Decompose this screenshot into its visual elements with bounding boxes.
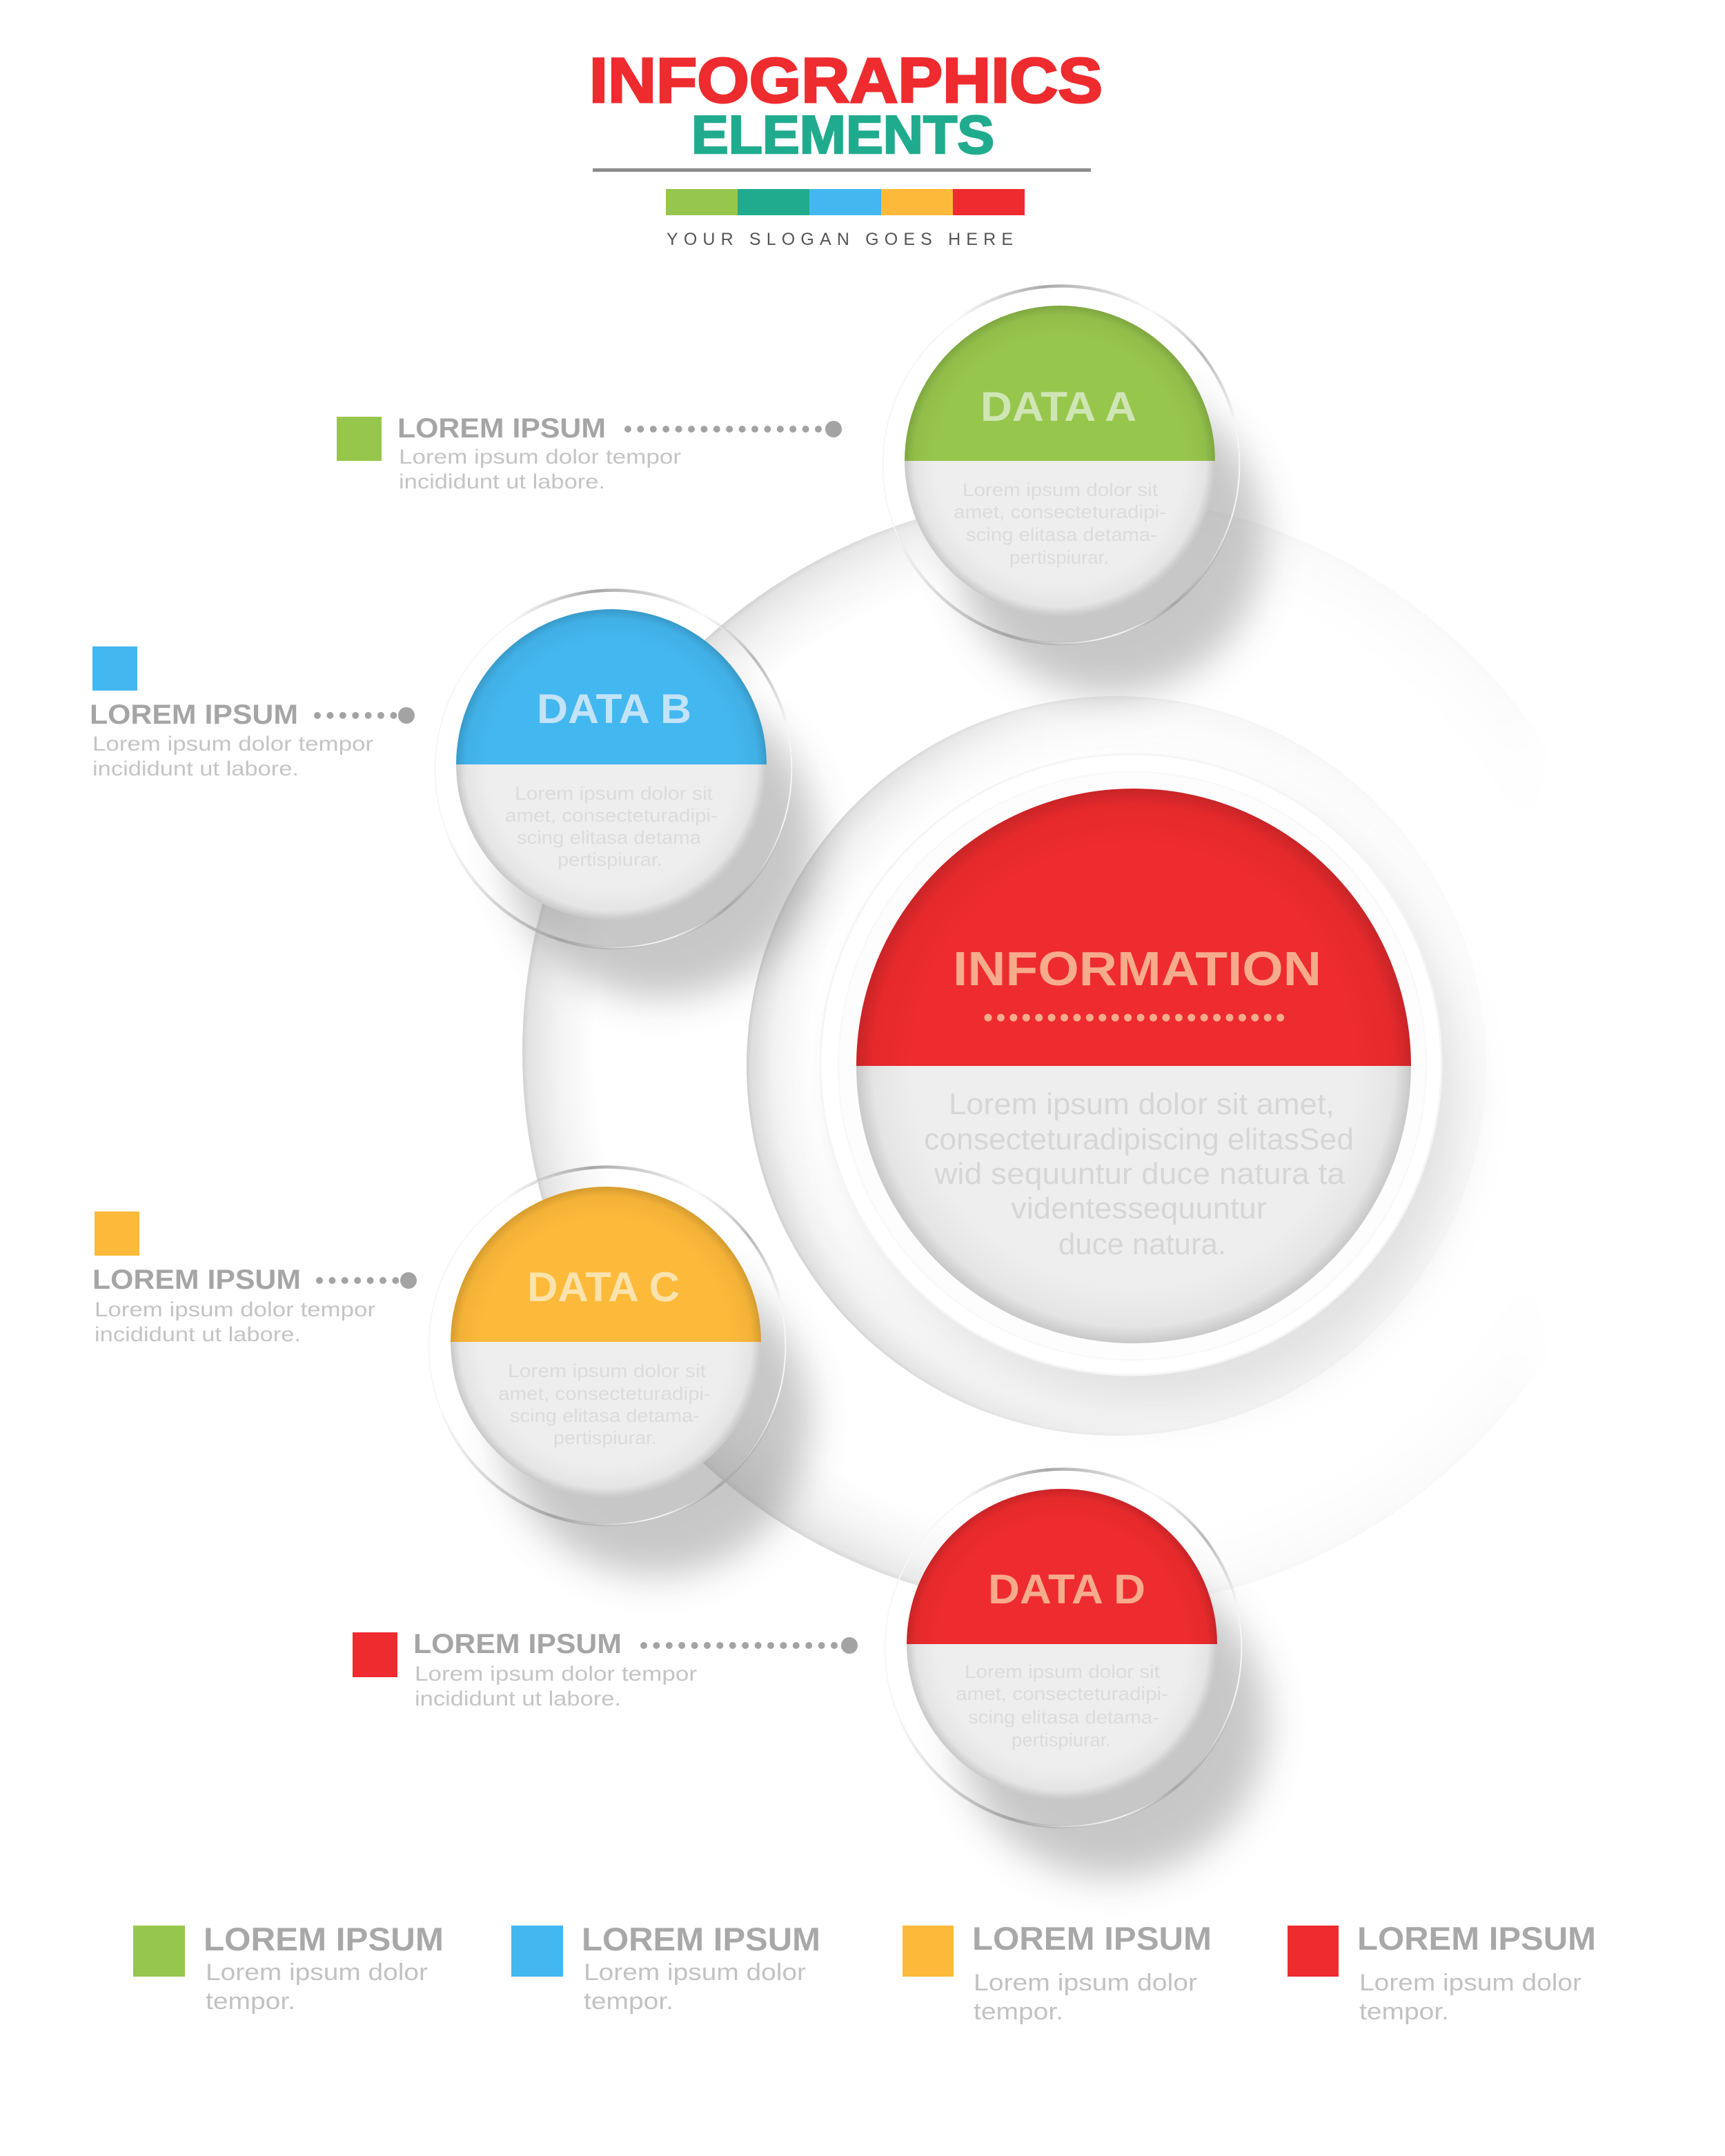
data d body text: Lorem ipsum dolor sit bbox=[965, 1661, 1161, 1682]
circle: data c bbox=[429, 1167, 811, 1576]
data d body text: amet, consecteturadipi- bbox=[956, 1683, 1168, 1704]
dotted leader c bbox=[319, 1277, 400, 1284]
legend: blue bbox=[511, 1921, 820, 2015]
data b body text: pertispiurar. bbox=[558, 849, 662, 870]
heading: data b: DATA B bbox=[537, 686, 691, 732]
legend: orange: LOREM IPSUM bbox=[972, 1920, 1212, 1957]
legend: green: Lorem ipsum dolor bbox=[206, 1959, 428, 1986]
information body text bbox=[924, 1087, 1354, 1261]
information body text: videntessequuntur bbox=[1011, 1191, 1267, 1225]
circle: data a bbox=[883, 286, 1265, 695]
legend: red bbox=[1288, 1920, 1596, 2025]
legend: orange: tempor. bbox=[974, 1999, 1063, 2025]
colour bar bbox=[666, 189, 1025, 215]
data c body text: Lorem ipsum dolor sit bbox=[508, 1361, 707, 1381]
central disc with rings bbox=[747, 696, 1486, 1436]
data a body text: amet, consecteturadipi- bbox=[954, 502, 1166, 522]
data d body text: scing elitasa detama- bbox=[968, 1707, 1159, 1728]
legend: green bbox=[133, 1921, 444, 2015]
legend: red: tempor. bbox=[1359, 1999, 1449, 2025]
legend: green: tempor. bbox=[206, 1988, 295, 2015]
callout: data b label: incididunt ut labore. bbox=[92, 758, 299, 780]
data b body text: Lorem ipsum dolor sit bbox=[515, 783, 713, 804]
title block bbox=[589, 46, 1103, 249]
circle: information bbox=[851, 783, 1417, 1349]
heading: data c: DATA C bbox=[527, 1264, 680, 1310]
callout: data c label: LOREM IPSUM bbox=[92, 1265, 301, 1295]
callout: data c label bbox=[92, 1211, 417, 1346]
dotted divider bbox=[988, 1014, 1293, 1021]
circle: data b bbox=[435, 590, 816, 998]
title: infographics: INFOGRAPHICS bbox=[589, 46, 1103, 116]
legend: red: Lorem ipsum dolor bbox=[1359, 1970, 1581, 1996]
dotted leader a bbox=[628, 426, 825, 433]
callout: data b label bbox=[90, 646, 415, 780]
data a body text: scing elitasa detama- bbox=[966, 524, 1157, 545]
callout: data b label: LOREM IPSUM bbox=[90, 700, 298, 730]
data c body text: scing elitasa detama- bbox=[510, 1405, 700, 1426]
swatch: blue bbox=[92, 646, 137, 691]
callout: data b label: Lorem ipsum dolor tempor bbox=[92, 733, 373, 755]
swatch: red bbox=[353, 1632, 397, 1677]
dotted leader d bbox=[644, 1642, 841, 1649]
slogan: YOUR SLOGAN GOES HERE bbox=[667, 230, 1013, 249]
data a body text: Lorem ipsum dolor sit bbox=[963, 479, 1159, 500]
title: elements: ELEMENTS bbox=[691, 104, 994, 165]
callout: data a label: LOREM IPSUM bbox=[397, 413, 606, 444]
data a body text bbox=[954, 479, 1166, 568]
data c body text: amet, consecteturadipi- bbox=[498, 1383, 711, 1404]
legend: orange: Lorem ipsum dolor bbox=[974, 1970, 1197, 1996]
callout: data d label: incididunt ut labore. bbox=[415, 1688, 621, 1710]
legend: blue: LOREM IPSUM bbox=[582, 1921, 820, 1957]
swatch: orange bbox=[95, 1211, 139, 1256]
data b body text bbox=[505, 783, 718, 870]
callout: data c label: Lorem ipsum dolor tempor bbox=[95, 1298, 375, 1321]
swatch: green bbox=[337, 417, 382, 461]
data c body text bbox=[498, 1361, 711, 1448]
data b body text: scing elitasa detama bbox=[517, 827, 702, 848]
information body text: Lorem ipsum dolor sit amet, bbox=[949, 1087, 1334, 1121]
data d body text: pertispiurar. bbox=[1012, 1730, 1111, 1750]
legend: blue: tempor. bbox=[584, 1988, 673, 2015]
callout: data a label: incididunt ut labore. bbox=[399, 471, 605, 493]
data b body text: amet, consecteturadipi- bbox=[505, 805, 718, 826]
heading: data d: DATA D bbox=[988, 1566, 1145, 1612]
connecting ring band bbox=[522, 519, 1228, 1590]
data d body text bbox=[956, 1661, 1168, 1750]
heading: information: INFORMATION bbox=[953, 942, 1321, 996]
legend: orange bbox=[903, 1920, 1212, 2025]
callout: data a label: Lorem ipsum dolor tempor bbox=[399, 446, 681, 468]
legend: blue: Lorem ipsum dolor bbox=[584, 1959, 806, 1986]
dotted leader b bbox=[317, 712, 398, 719]
legend: green: LOREM IPSUM bbox=[204, 1921, 444, 1957]
information body text: duce natura. bbox=[1058, 1227, 1226, 1261]
callout: data d label bbox=[353, 1629, 858, 1710]
information body text: wid sequuntur duce natura ta bbox=[934, 1157, 1346, 1191]
data a body text: pertispiurar. bbox=[1009, 547, 1109, 568]
legend: red: LOREM IPSUM bbox=[1357, 1920, 1596, 1957]
callout: data d label: LOREM IPSUM bbox=[413, 1629, 622, 1659]
callout: data c label: incididunt ut labore. bbox=[95, 1323, 301, 1346]
circle: data d bbox=[885, 1469, 1268, 1878]
callout: data a label bbox=[337, 413, 842, 493]
heading: data a: DATA A bbox=[980, 384, 1136, 430]
data c body text: pertispiurar. bbox=[553, 1427, 657, 1448]
information body text: consecteturadipiscing elitasSed bbox=[924, 1122, 1354, 1156]
callout: data d label: Lorem ipsum dolor tempor bbox=[415, 1663, 697, 1685]
